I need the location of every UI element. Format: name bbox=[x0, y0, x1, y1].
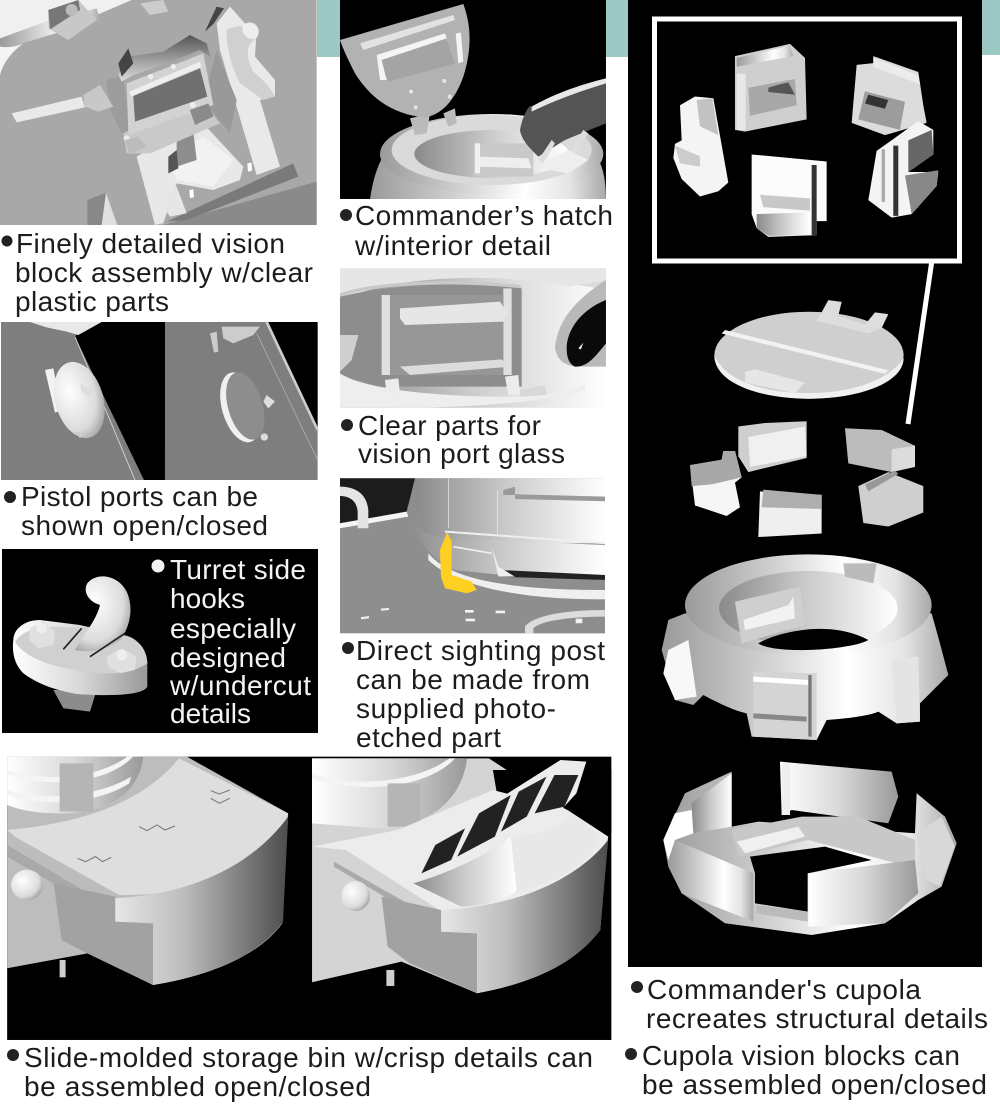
caption: turret side hooks: w/undercut bbox=[169, 670, 311, 701]
cupola hatch disc bbox=[714, 300, 904, 399]
cupola base bbox=[663, 762, 957, 935]
caption: cupola vision blocks bbox=[625, 1040, 987, 1100]
caption: turret side hooks: details bbox=[170, 698, 251, 729]
teal background strips bbox=[317, 0, 1000, 57]
caption: storage bin bbox=[7, 1042, 593, 1102]
panel: pistol port closed bbox=[165, 322, 318, 480]
leader line to inset bbox=[908, 260, 932, 424]
panel: direct sighting post render bbox=[340, 478, 605, 633]
panel: pistol port open bbox=[1, 322, 165, 480]
caption: clear parts: Clear parts for bbox=[358, 410, 541, 441]
caption: clear parts bbox=[341, 410, 565, 469]
caption: turret side hooks: Turret side bbox=[170, 554, 306, 585]
caption: storage bin: Slide-molded storage bin w/crisp details can bbox=[24, 1042, 593, 1073]
icon: hook render bbox=[13, 576, 147, 712]
panel: turret side hook bbox=[2, 549, 318, 733]
closed bin bbox=[7, 757, 288, 985]
panel: commander's hatch render bbox=[340, 0, 606, 199]
caption: commander's hatch bbox=[340, 200, 613, 261]
inset: vision blocks close-up bbox=[654, 19, 960, 261]
caption: turret side hooks bbox=[152, 554, 311, 729]
caption: pistol ports bbox=[4, 481, 268, 541]
caption: vision block: block assembly w/clear bbox=[15, 257, 313, 288]
caption: storage bin: be assembled open/closed bbox=[24, 1071, 371, 1102]
caption: direct sighting post bbox=[342, 635, 605, 753]
open bin bbox=[312, 758, 611, 993]
caption: direct sighting post: supplied photo- bbox=[356, 693, 556, 724]
caption: turret side hooks: especially bbox=[170, 613, 296, 644]
panel: commander's cupola exploded view bbox=[628, 0, 982, 967]
panel: vision block assembly render bbox=[0, 0, 317, 225]
caption: direct sighting post: Direct sighting post bbox=[356, 635, 605, 666]
cupola vision block parts bbox=[690, 421, 923, 537]
caption: pistol ports: Pistol ports can be bbox=[21, 481, 258, 512]
caption: pistol ports: shown open/closed bbox=[21, 510, 268, 541]
caption: vision block: plastic parts bbox=[15, 286, 169, 317]
panel: clear parts vision port render bbox=[340, 268, 606, 408]
caption: commander's cupola: Commander's cupola bbox=[647, 974, 921, 1005]
caption: direct sighting post: can be made from bbox=[356, 664, 590, 695]
panel: storage bin renders bbox=[7, 757, 611, 1040]
caption: turret side hooks: designed bbox=[170, 642, 286, 673]
caption: vision block: Finely detailed vision bbox=[16, 228, 285, 259]
caption: vision block bbox=[2, 228, 313, 317]
caption: commander's hatch: w/interior detail bbox=[354, 230, 551, 261]
caption: commander's cupola bbox=[631, 974, 988, 1034]
caption: clear parts: vision port glass bbox=[358, 438, 565, 469]
caption: commander's hatch: Commander’s hatch bbox=[355, 200, 613, 231]
caption: commander's cupola: recreates structural details bbox=[646, 1003, 988, 1034]
caption: direct sighting post: etched part bbox=[356, 722, 501, 753]
caption: turret side hooks: hooks bbox=[170, 583, 245, 614]
caption: cupola vision blocks: be assembled open/closed bbox=[642, 1069, 987, 1100]
caption: cupola vision blocks: Cupola vision blocks can bbox=[642, 1040, 960, 1071]
cupola ring bbox=[662, 554, 948, 740]
